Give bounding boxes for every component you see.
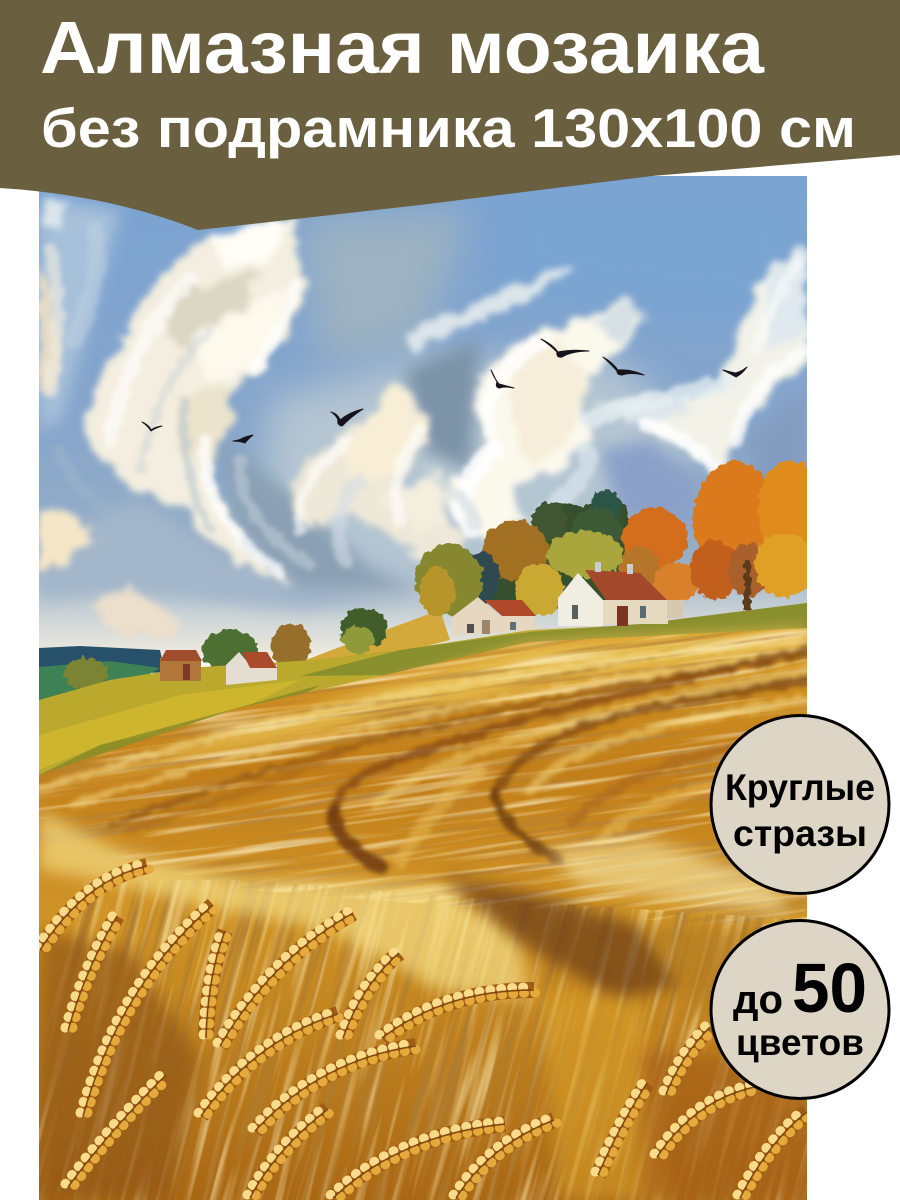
title: Алмазная мозаика (40, 6, 765, 89)
badge: up to 50 colours: 50 (792, 949, 867, 1027)
bright and dark swathes (39, 810, 807, 1200)
wheat ears (37, 863, 810, 1200)
brick house (160, 650, 202, 681)
middle house (452, 597, 536, 636)
distant forest and hill (39, 610, 450, 705)
birds (142, 339, 747, 443)
bird 3 (331, 409, 363, 426)
badge: round rhinestones: Круглые (725, 767, 875, 808)
bird 6 (603, 357, 644, 375)
furrows (40, 640, 807, 868)
far hills (39, 603, 807, 780)
ears: light grains (37, 863, 804, 1195)
cloud: wisp (405, 268, 575, 353)
subtitle: без подрамника 130х100 см (41, 97, 856, 159)
small white house (226, 652, 277, 685)
bird 4 (491, 370, 514, 388)
large white house (558, 562, 683, 626)
farmhouses (160, 562, 683, 685)
cloud brush strokes (50, 230, 807, 572)
bird 7 (723, 367, 747, 377)
cloud: large left (84, 218, 302, 582)
cloud: left edge fragments (39, 198, 180, 640)
badge: up to 50 colours (711, 920, 889, 1098)
autumn trees (64, 460, 822, 690)
ears: gold grains (43, 869, 810, 1200)
badge: up to 50 colours: до (733, 978, 783, 1022)
cloud: right of centre (445, 296, 642, 545)
sky (39, 176, 807, 656)
main wheat field (39, 620, 807, 1200)
cloud: right (590, 240, 807, 475)
badge: round rhinestones: стразы (733, 813, 867, 854)
painting: wheat field landscape (39, 176, 807, 1200)
clouds (39, 198, 807, 640)
badge: up to 50 colours: цветов (736, 1022, 864, 1063)
header banner (0, 0, 900, 230)
bird 5 (541, 339, 589, 357)
bird 1 (142, 422, 162, 431)
cloud: centre (290, 380, 470, 560)
bird 2 (233, 435, 253, 443)
badge: round rhinestones (711, 716, 889, 894)
ears: centre stem (40, 866, 807, 1198)
ears: shaded body (40, 866, 807, 1198)
